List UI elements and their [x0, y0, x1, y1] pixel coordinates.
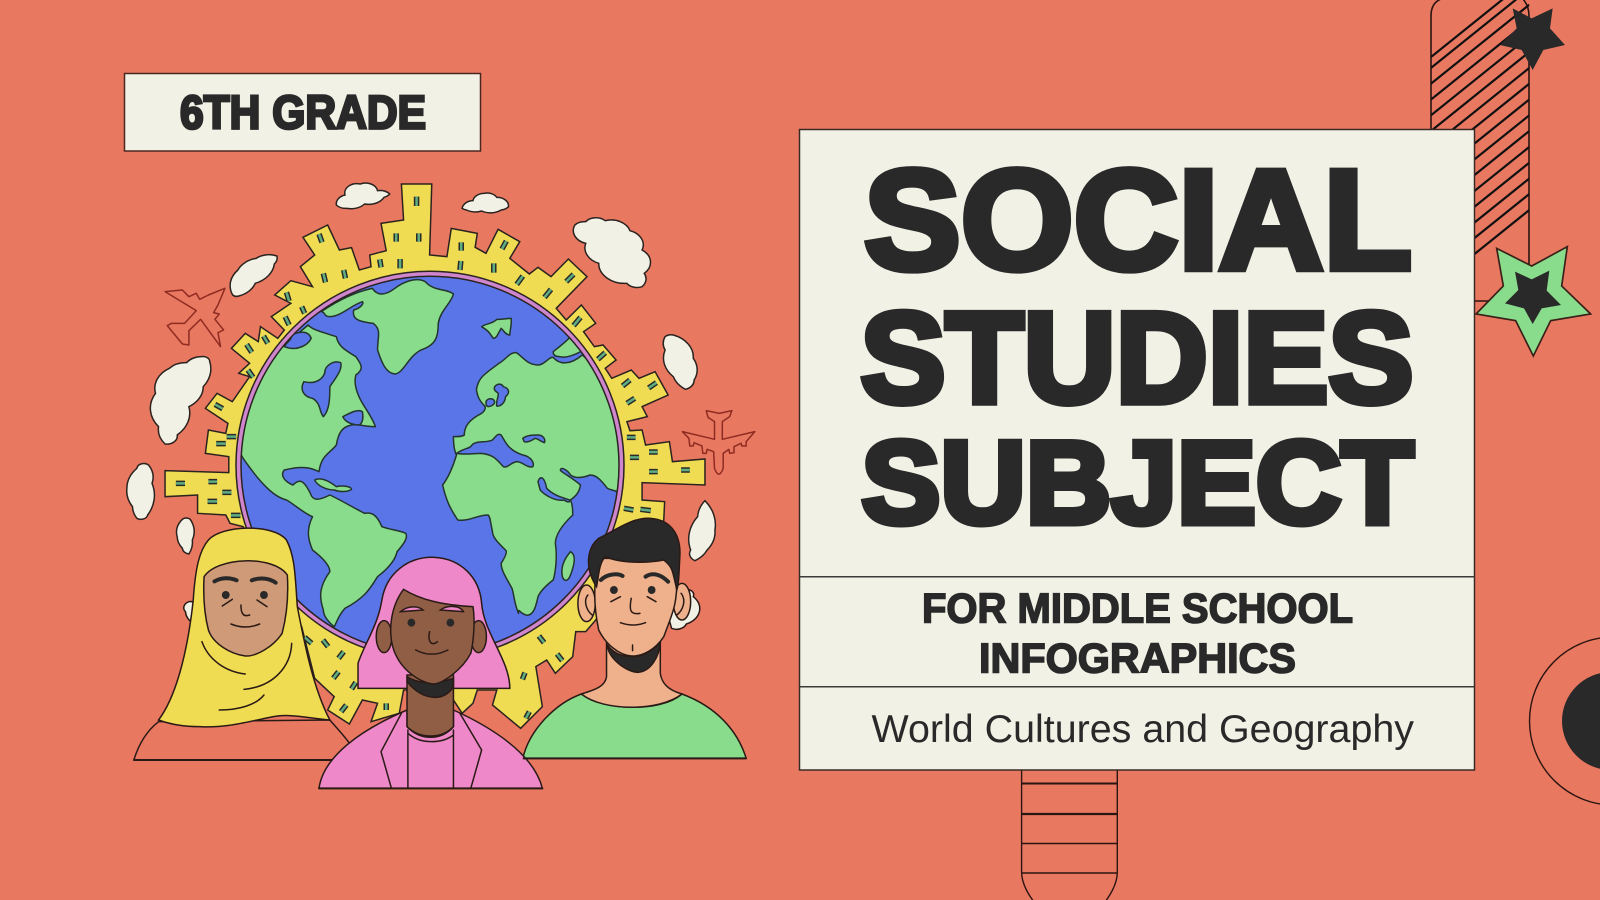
icon: airplane left	[165, 288, 225, 347]
main title card	[800, 130, 1474, 770]
badge: 6th grade	[124, 74, 480, 151]
person: man in green shirt	[523, 518, 746, 758]
globe	[235, 270, 625, 648]
title: social studies subject: STUDIES	[860, 286, 1414, 430]
badge: 6th grade: 6TH GRADE	[180, 86, 426, 138]
illustration: globe, city and people	[127, 183, 755, 788]
clouds	[127, 183, 715, 561]
hatched pill decoration	[1431, 0, 1529, 301]
person: woman in yellow hijab	[134, 528, 351, 760]
tagline: world cultures and geography: World Cultures and Geography	[872, 708, 1414, 751]
person: woman with pink hair	[319, 557, 542, 788]
icon: black star	[1500, 8, 1565, 70]
title: social studies subject	[860, 141, 1414, 548]
subtitle: for middle school infographics: FOR MIDDLE SCHOOL	[922, 584, 1353, 632]
icon: airplane right	[682, 411, 755, 474]
striped bottom pill decoration	[1022, 765, 1117, 900]
subtitle: for middle school infographics: INFOGRAPHICS	[979, 634, 1296, 682]
city ring	[165, 184, 705, 728]
concentric circle decoration	[1530, 637, 1600, 805]
icon: green star	[1476, 247, 1591, 356]
illustration base lines	[134, 758, 746, 760]
subtitle: for middle school infographics	[922, 584, 1353, 682]
divider lines	[800, 577, 1474, 687]
title: social studies subject: SUBJECT	[862, 417, 1414, 548]
title: social studies subject: SOCIAL	[864, 141, 1412, 300]
